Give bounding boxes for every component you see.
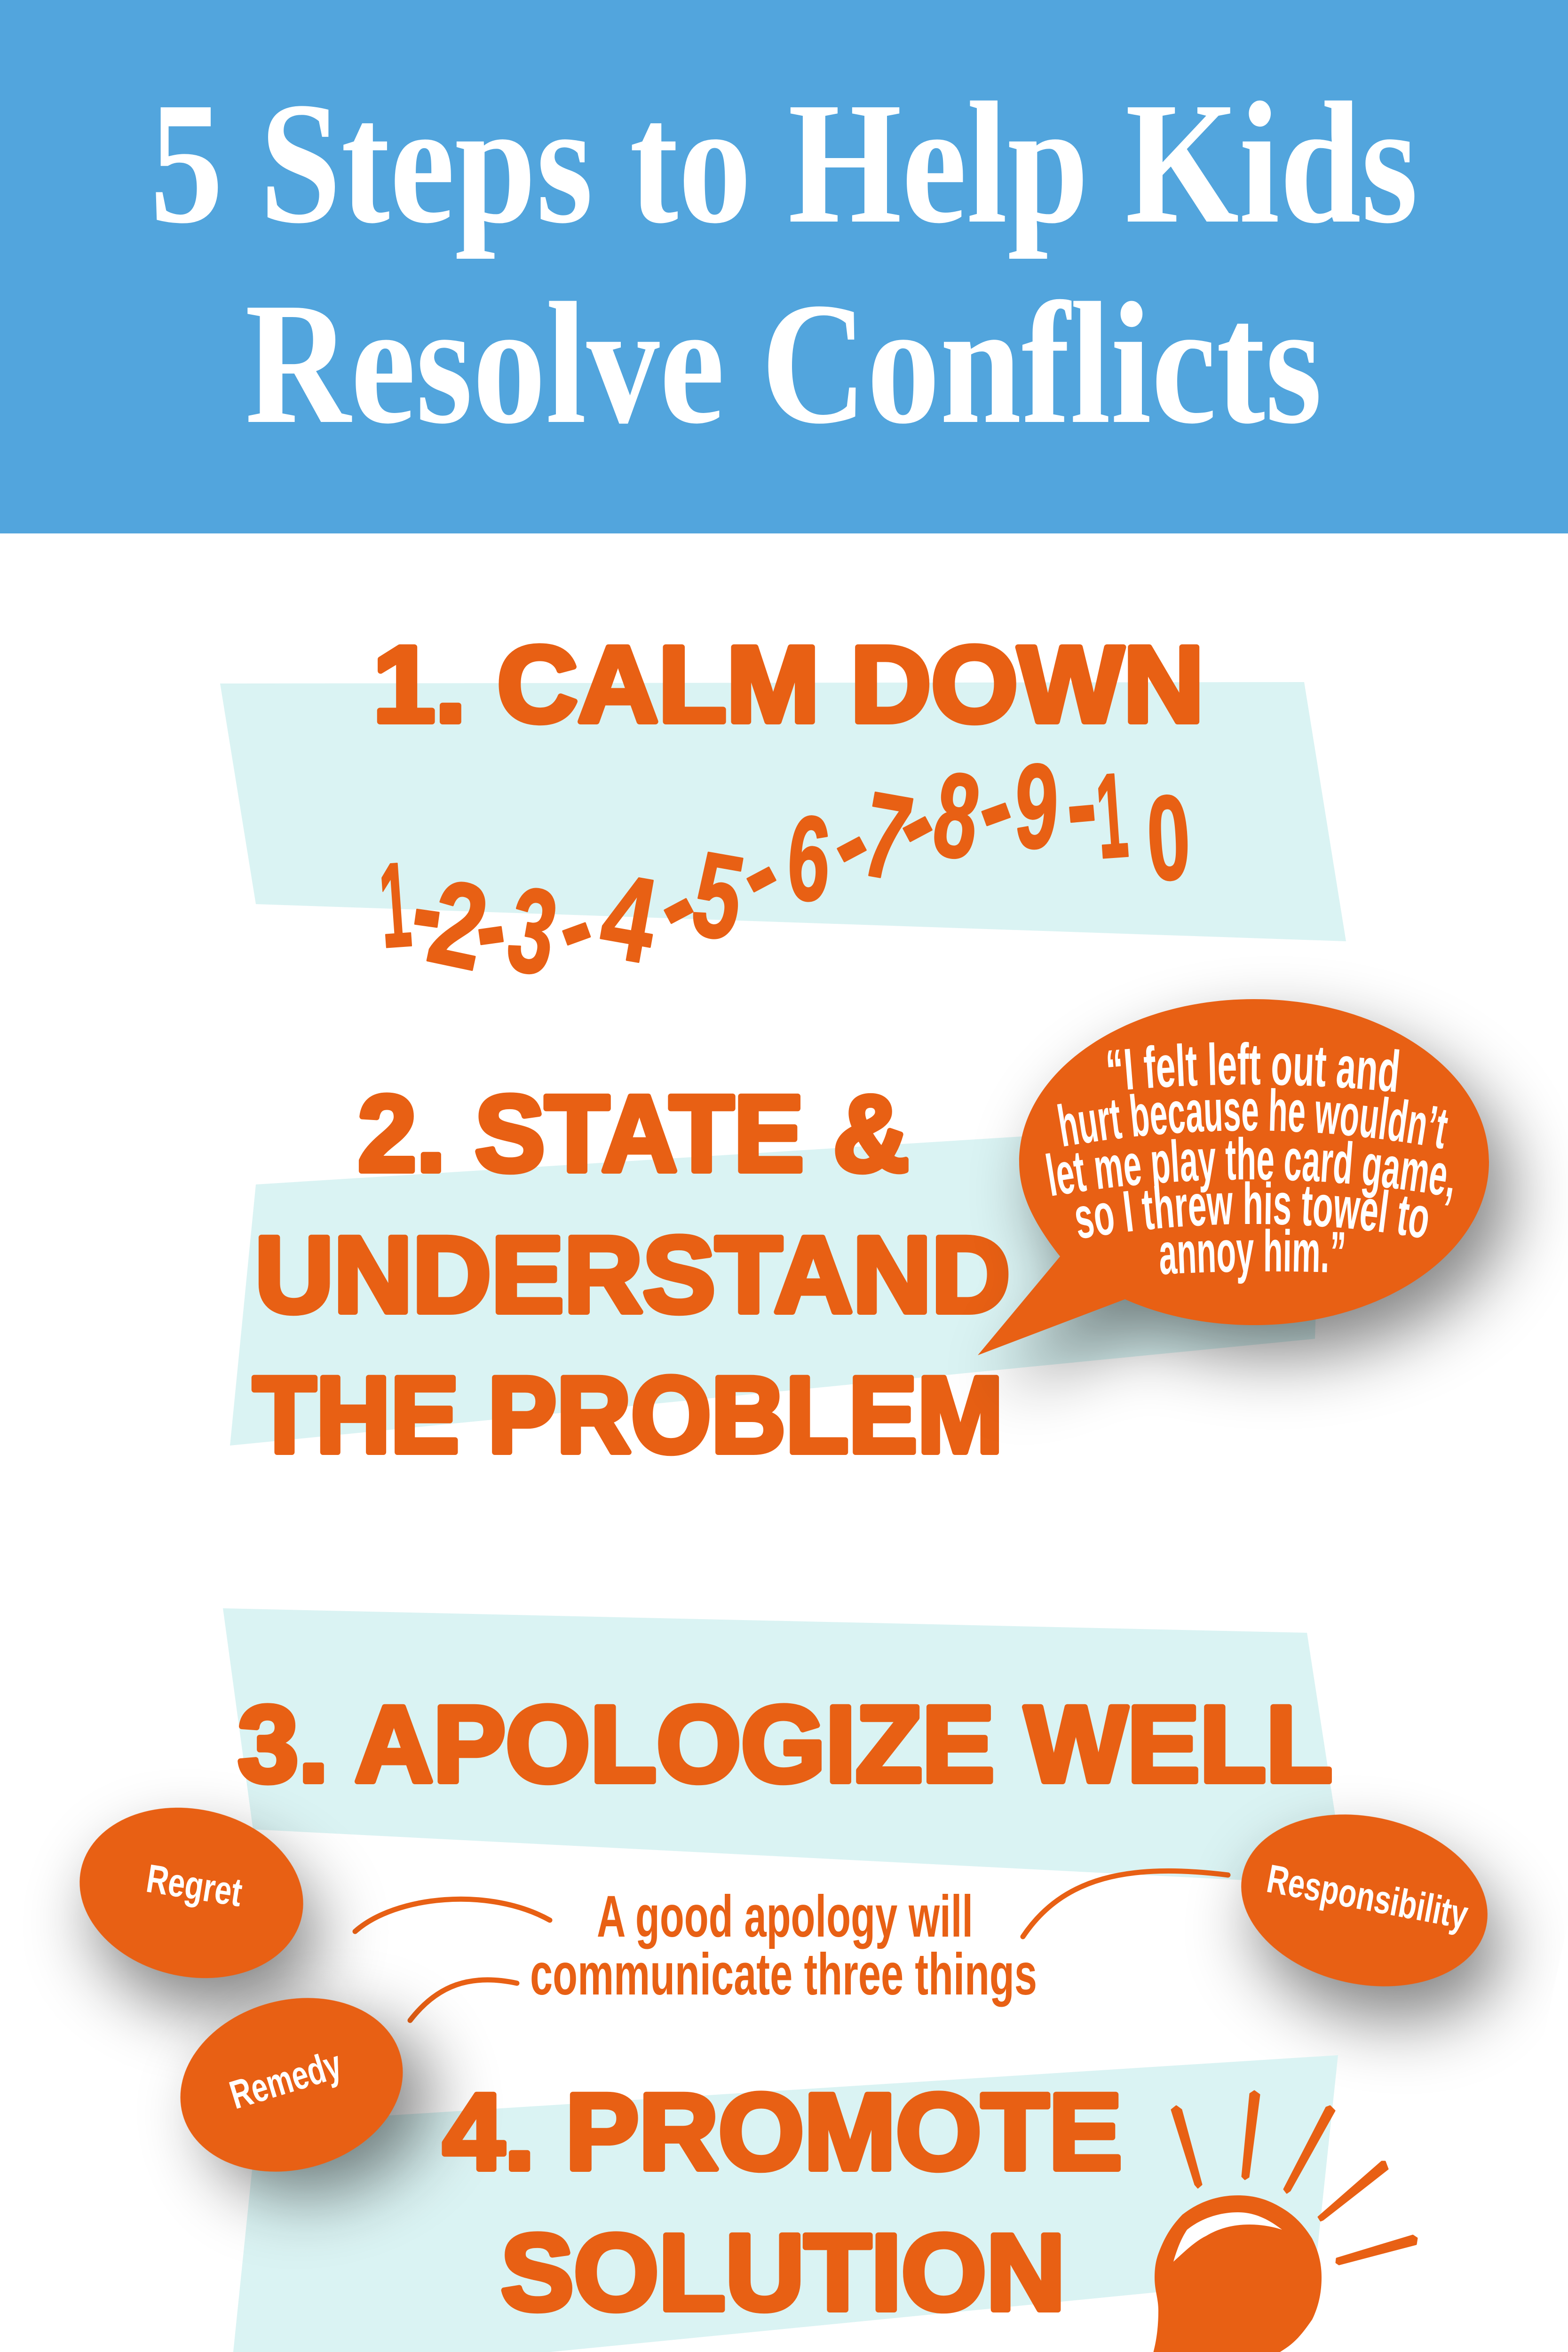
- counting 1 to 10: 5: [683, 826, 753, 966]
- callout: apology text: [530, 1884, 1037, 2007]
- panel: step 3 apologize well: [63, 1608, 1504, 2020]
- counting 1 to 10: 1: [375, 837, 415, 973]
- counting 1 to 10: [375, 736, 1194, 1001]
- heading: step 1: 1. CALM DOWN: [373, 624, 1204, 745]
- counting 1 to 10: -: [801, 774, 893, 907]
- heading: step 4: SOLUTION: [501, 2212, 1065, 2333]
- oval: responsibility: Responsibility: [1264, 1856, 1472, 1938]
- counting 1 to 10: 0: [1144, 770, 1194, 906]
- oval: regret: Regret: [143, 1856, 245, 1915]
- counting 1 to 10: -: [466, 857, 514, 994]
- title: Resolve Conflicts: [245, 267, 1322, 460]
- counting 1 to 10: 9: [1013, 739, 1061, 874]
- quote text: hurt because he wouldn’t: [1053, 1078, 1453, 1161]
- header banner: [0, 0, 1568, 533]
- panel: step 1 calm down: [220, 624, 1346, 1001]
- quote text: annoy him.”: [1157, 1219, 1347, 1287]
- connector curve: responsibility: [1023, 1871, 1228, 1937]
- heading: step 2: THE PROBLEM: [253, 1354, 1003, 1475]
- oval: regret: [63, 1788, 319, 1998]
- panel: step 4 promote solution finding: [161, 1974, 1417, 2352]
- oval: remedy: Remedy: [225, 2042, 347, 2118]
- heading: step 3: 3. APOLOGIZE WELL: [238, 1684, 1332, 1804]
- counting 1 to 10: 4: [592, 848, 666, 989]
- counting 1 to 10: 1: [1092, 748, 1132, 884]
- quote text: “I felt left out and: [1103, 1032, 1403, 1105]
- heading: step 4: 4. PROMOTE: [443, 2071, 1122, 2192]
- counting 1 to 10: -: [955, 737, 1030, 874]
- counting 1 to 10: 6: [784, 791, 834, 927]
- title: [150, 66, 1418, 460]
- counting 1 to 10: 2: [419, 854, 499, 996]
- counting 1 to 10: -: [628, 835, 720, 969]
- counting 1 to 10: -: [536, 856, 610, 993]
- speech bubble: [978, 999, 1489, 1355]
- counting 1 to 10: 7: [853, 767, 921, 906]
- heading: step 2: [253, 1073, 1010, 1475]
- icon: light bulb: [1128, 2091, 1417, 2352]
- heading: step 4: [443, 2071, 1122, 2352]
- quote text: let me play the card game,: [1042, 1127, 1462, 1210]
- counting 1 to 10: 3: [499, 861, 566, 1001]
- quote text: so I threw his towel to: [1069, 1171, 1434, 1252]
- counting 1 to 10: -: [404, 840, 452, 977]
- oval: remedy: [161, 1974, 422, 2196]
- connector curve: remedy: [410, 1980, 517, 2020]
- oval: responsibility: [1225, 1793, 1504, 2008]
- counting 1 to 10: -: [711, 804, 802, 938]
- counting 1 to 10: -: [867, 754, 958, 887]
- callout: apology text: communicate three things: [530, 1942, 1037, 2007]
- connector curve: regret: [355, 1899, 550, 1931]
- counting 1 to 10: 8: [926, 747, 988, 885]
- heading: step 2: UNDERSTAND: [255, 1214, 1010, 1335]
- counting 1 to 10: -: [1060, 736, 1102, 872]
- panel: step 2 state and understand: [230, 999, 1489, 1475]
- heading: step 2: 2. STATE &: [358, 1073, 909, 1194]
- quote text: [1042, 1032, 1462, 1287]
- callout: apology text: A good apology will: [597, 1884, 973, 1949]
